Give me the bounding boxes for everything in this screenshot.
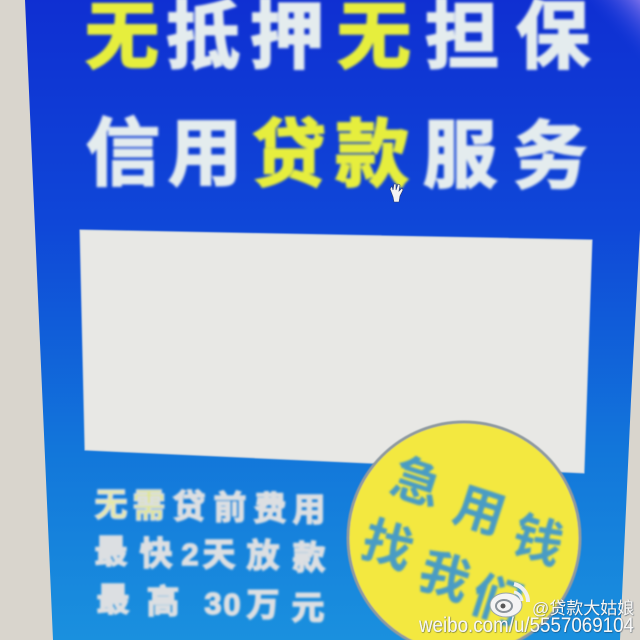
line: up to 300k yuan: [96, 581, 324, 626]
line: fastest 2 days: 款: [292, 539, 326, 576]
watermark: weibo account: @贷款大姑娘: [532, 599, 634, 618]
callout text: urgent money: 钱: [505, 507, 570, 575]
line: up to 300k yuan: 最: [96, 581, 130, 618]
heading: line two 信用贷款服务: 服: [423, 114, 497, 197]
callout: yellow circle badge: [348, 422, 580, 640]
line: fastest 2 days: 天: [202, 536, 236, 573]
line: no upfront fee: 用: [292, 491, 326, 528]
callout text: urgent money: [355, 449, 570, 635]
icon: weibo logo: [490, 584, 528, 617]
line: up to 300k yuan: 元: [292, 589, 324, 626]
text block: loan features: [94, 486, 326, 626]
callout text: urgent money: 找: [355, 512, 420, 580]
line: up to 300k yuan: 万: [246, 586, 280, 623]
blank white panel: [80, 230, 592, 473]
callout text: urgent money: 我: [412, 543, 477, 611]
heading: line two 信用贷款服务: 款: [335, 113, 409, 196]
callout text: urgent money: 们: [464, 567, 529, 635]
callout text: urgent money: 用: [447, 477, 512, 545]
line: no upfront fee: 费: [254, 490, 286, 527]
callout text: urgent money: 急: [384, 449, 449, 517]
heading: line two 信用贷款服务: 用: [168, 112, 242, 195]
line: fastest 2 days: 快: [140, 535, 172, 572]
heading: line two 信用贷款服务: 贷: [252, 113, 326, 196]
watermark: weibo account: [418, 599, 634, 637]
line: no upfront fee: 无: [94, 486, 128, 523]
line: fastest 2 days: 放: [246, 537, 280, 574]
line: fastest 2 days: 2: [181, 537, 199, 572]
line: no upfront fee: 前: [214, 489, 246, 526]
line: up to 300k yuan: 3: [204, 586, 222, 621]
line: fastest 2 days: 最: [94, 533, 128, 570]
line: no upfront fee: 贷: [172, 488, 206, 525]
line: fastest 2 days: [94, 533, 326, 576]
line: up to 300k yuan: 高: [146, 583, 180, 620]
line: up to 300k yuan: 0: [223, 587, 241, 622]
heading: line one 无抵押无担保: [85, 0, 590, 78]
line: no upfront fee: [94, 486, 326, 528]
line: no upfront fee: 需: [132, 487, 166, 524]
heading: line two 信用贷款服务: 务: [513, 115, 587, 198]
heading: line two 信用贷款服务: [86, 112, 587, 198]
heading: line two 信用贷款服务: 信: [86, 112, 160, 195]
icon: hand cursor: [390, 184, 403, 202]
